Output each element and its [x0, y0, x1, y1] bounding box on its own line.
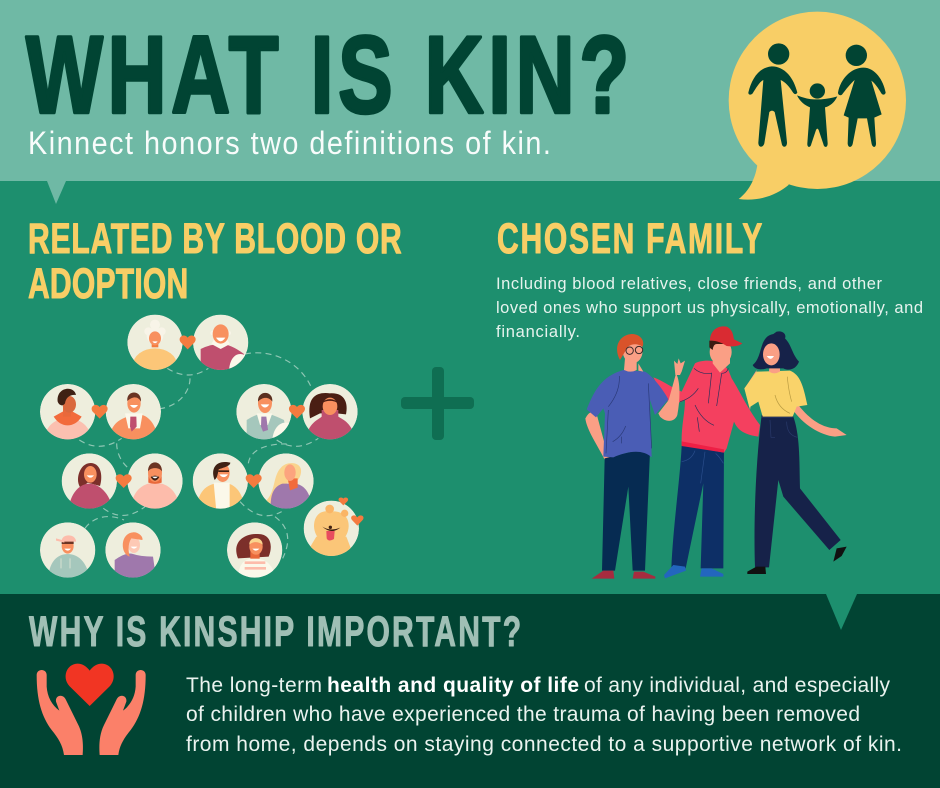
- text: why kinship matters: of children who have experienced the trauma of having been removed: [186, 703, 860, 726]
- icon: speech bubble with family: [729, 12, 906, 200]
- illustration: three friends: [585, 326, 847, 579]
- title: WHAT IS KIN?: [26, 12, 629, 136]
- middle band pointer: [826, 594, 857, 630]
- friend: woman in yellow: [744, 331, 847, 574]
- avatar: blonde woman: [258, 453, 314, 511]
- avatar: woman in maroon: [62, 453, 117, 511]
- text: chosen family description: financially.: [496, 323, 580, 341]
- illustration: family tree: [40, 315, 364, 580]
- heading: related by blood or adoption: RELATED BY BLOOD OR: [28, 214, 402, 262]
- avatar: man in pink: [127, 453, 183, 511]
- avatar: teen with cap: [40, 522, 95, 580]
- text: chosen family description: loved ones who support us physically, emotionally, and: [496, 299, 923, 317]
- subtitle: Kinnect honors two definitions of kin.: [28, 126, 551, 161]
- heading: related by blood or adoption: [28, 214, 402, 307]
- avatar: dog: [304, 501, 359, 558]
- avatar: girl with striped shirt: [227, 522, 282, 580]
- text: chosen family description: Including blood relatives, close friends, and other: [496, 275, 882, 293]
- heart: [339, 497, 348, 505]
- avatar: man with glasses: [193, 453, 248, 511]
- text: why kinship matters: [186, 674, 902, 756]
- avatar: woman with curly hair: [302, 384, 358, 442]
- heart: [116, 474, 132, 488]
- family tree connectors: [79, 353, 318, 558]
- heading: why is kinship important: WHY IS KINSHIP IMPORTANT?: [29, 607, 521, 655]
- heart: [289, 405, 305, 419]
- friend: man in blue shirt: [585, 334, 685, 579]
- header pointer: [47, 181, 66, 204]
- avatar: woman with bun: [40, 384, 95, 442]
- panel: middle band: [0, 181, 940, 594]
- avatar: grandmother: [127, 314, 182, 370]
- panel: bottom band: [0, 594, 940, 788]
- icon: plus sign: [401, 367, 474, 440]
- text: why kinship matters: from home, depends on staying connected to a supportive network of kin.: [186, 733, 902, 756]
- text: why kinship matters: The long-term: [186, 674, 322, 697]
- icon: hands holding heart: [37, 664, 146, 755]
- avatar: woman with red hair: [105, 522, 161, 580]
- text: why kinship matters: of any individual, and especially: [584, 674, 890, 697]
- avatar: man with tie: [106, 384, 161, 442]
- text: chosen family description: [496, 275, 923, 341]
- panel: header band: [0, 0, 940, 181]
- text: why kinship matters: health and quality of life: [327, 674, 579, 697]
- heart: [92, 405, 108, 419]
- heart: [180, 336, 196, 349]
- heading: related by blood or adoption: ADOPTION: [28, 259, 188, 307]
- avatar: man with vest: [236, 384, 292, 442]
- heading: chosen family: CHOSEN FAMILY: [497, 214, 762, 262]
- friend: man in red hoodie: [653, 326, 760, 578]
- avatar: grandfather: [193, 315, 248, 372]
- heart: [246, 474, 262, 488]
- heart: [351, 515, 364, 526]
